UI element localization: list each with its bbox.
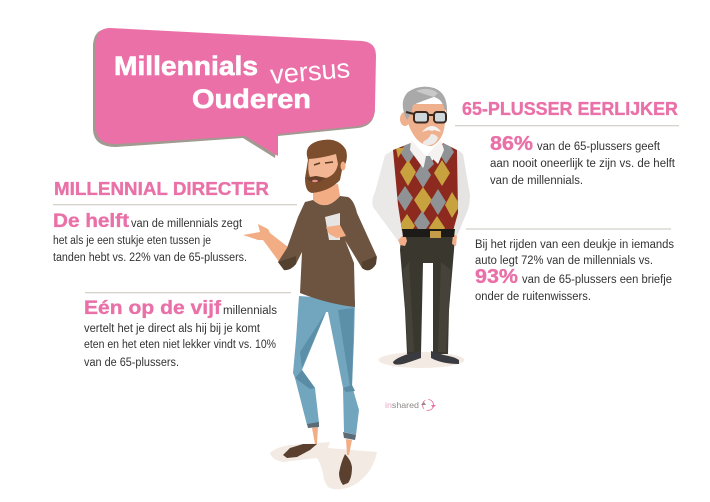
moustache and beard [422, 126, 441, 132]
text block: een op de vijf: vertelt het je direct als hij bij je komt [84, 323, 261, 335]
text block: 93%: Bij het rijden van een deukje in iemands [475, 239, 674, 251]
title: versus: versus [269, 53, 351, 90]
illustration: millennial [243, 140, 377, 489]
trouser cuffs [307, 422, 319, 428]
text block: 93%: auto legt 72% van de millennials vs. [475, 255, 653, 267]
glasses [406, 112, 446, 122]
text block: 93% [475, 239, 674, 303]
text block: 86%: 86% [490, 133, 533, 155]
heading: 65-plusser eerlijker: 65-PLUSSER EERLIJKER [462, 99, 678, 119]
floor shadow [270, 442, 377, 489]
moustache [306, 176, 326, 183]
text block: 93%: 93% [475, 266, 518, 288]
ankles [312, 427, 318, 444]
text block: de helft: De helft [53, 211, 130, 232]
shirt sleeves [372, 149, 405, 241]
text block: de helft [53, 211, 247, 264]
logo: inshared: inshared [385, 400, 419, 410]
heading: millennial directer: MILLENNIAL DIRECTER [54, 179, 269, 199]
trousers [400, 236, 455, 354]
illustration: older man [372, 87, 470, 368]
grey hair [403, 87, 447, 120]
neck [313, 184, 340, 205]
text block: 86%: aan nooit oneerlijk te zijn vs. de helft [490, 158, 676, 170]
brown shirt [278, 196, 377, 307]
text block: een op de vijf: Eén op de vijf [84, 297, 222, 319]
text block: een op de vijf [84, 297, 277, 369]
shoes [283, 444, 317, 458]
mouth [312, 180, 318, 182]
title: Millennials: Millennials [114, 51, 258, 81]
head [407, 104, 445, 146]
eye and brow [314, 162, 333, 165]
right arm [330, 225, 376, 270]
text block: 86%: van de millennials. [490, 175, 583, 187]
belt and buckle [402, 229, 455, 238]
left arm [243, 224, 288, 263]
text block: 93%: onder de ruitenwissers. [475, 291, 591, 303]
ear [340, 162, 346, 170]
glass [325, 213, 340, 240]
text block: de helft: van de millennials zegt [131, 218, 243, 230]
hand holding glass [326, 225, 346, 238]
face [308, 154, 338, 178]
hair and beard [305, 140, 347, 193]
text block: 86%: van de 65-plussers geeft [537, 141, 661, 153]
speech bubble title [93, 28, 376, 158]
text block: 86% [490, 133, 676, 187]
title: Ouderen: Ouderen [192, 84, 311, 114]
argyle vest [393, 143, 458, 231]
text block: de helft: het als je een stukje eten tussen je [53, 235, 211, 247]
text block: een op de vijf: millennials [223, 305, 277, 317]
text block: de helft: tanden hebt vs. 22% van de 65-plussers. [53, 252, 247, 264]
logo: inshared [385, 400, 436, 410]
floor shadow [378, 352, 464, 368]
collar [410, 140, 444, 168]
text block: een op de vijf: eten en het eten niet lekker vindt vs. 10% [84, 339, 276, 351]
jeans [293, 296, 359, 435]
text block: 93%: van de 65-plussers een briefje [522, 274, 672, 286]
text block: een op de vijf: van de 65-plussers. [84, 357, 179, 369]
hands [398, 234, 407, 246]
shoes [393, 351, 421, 365]
